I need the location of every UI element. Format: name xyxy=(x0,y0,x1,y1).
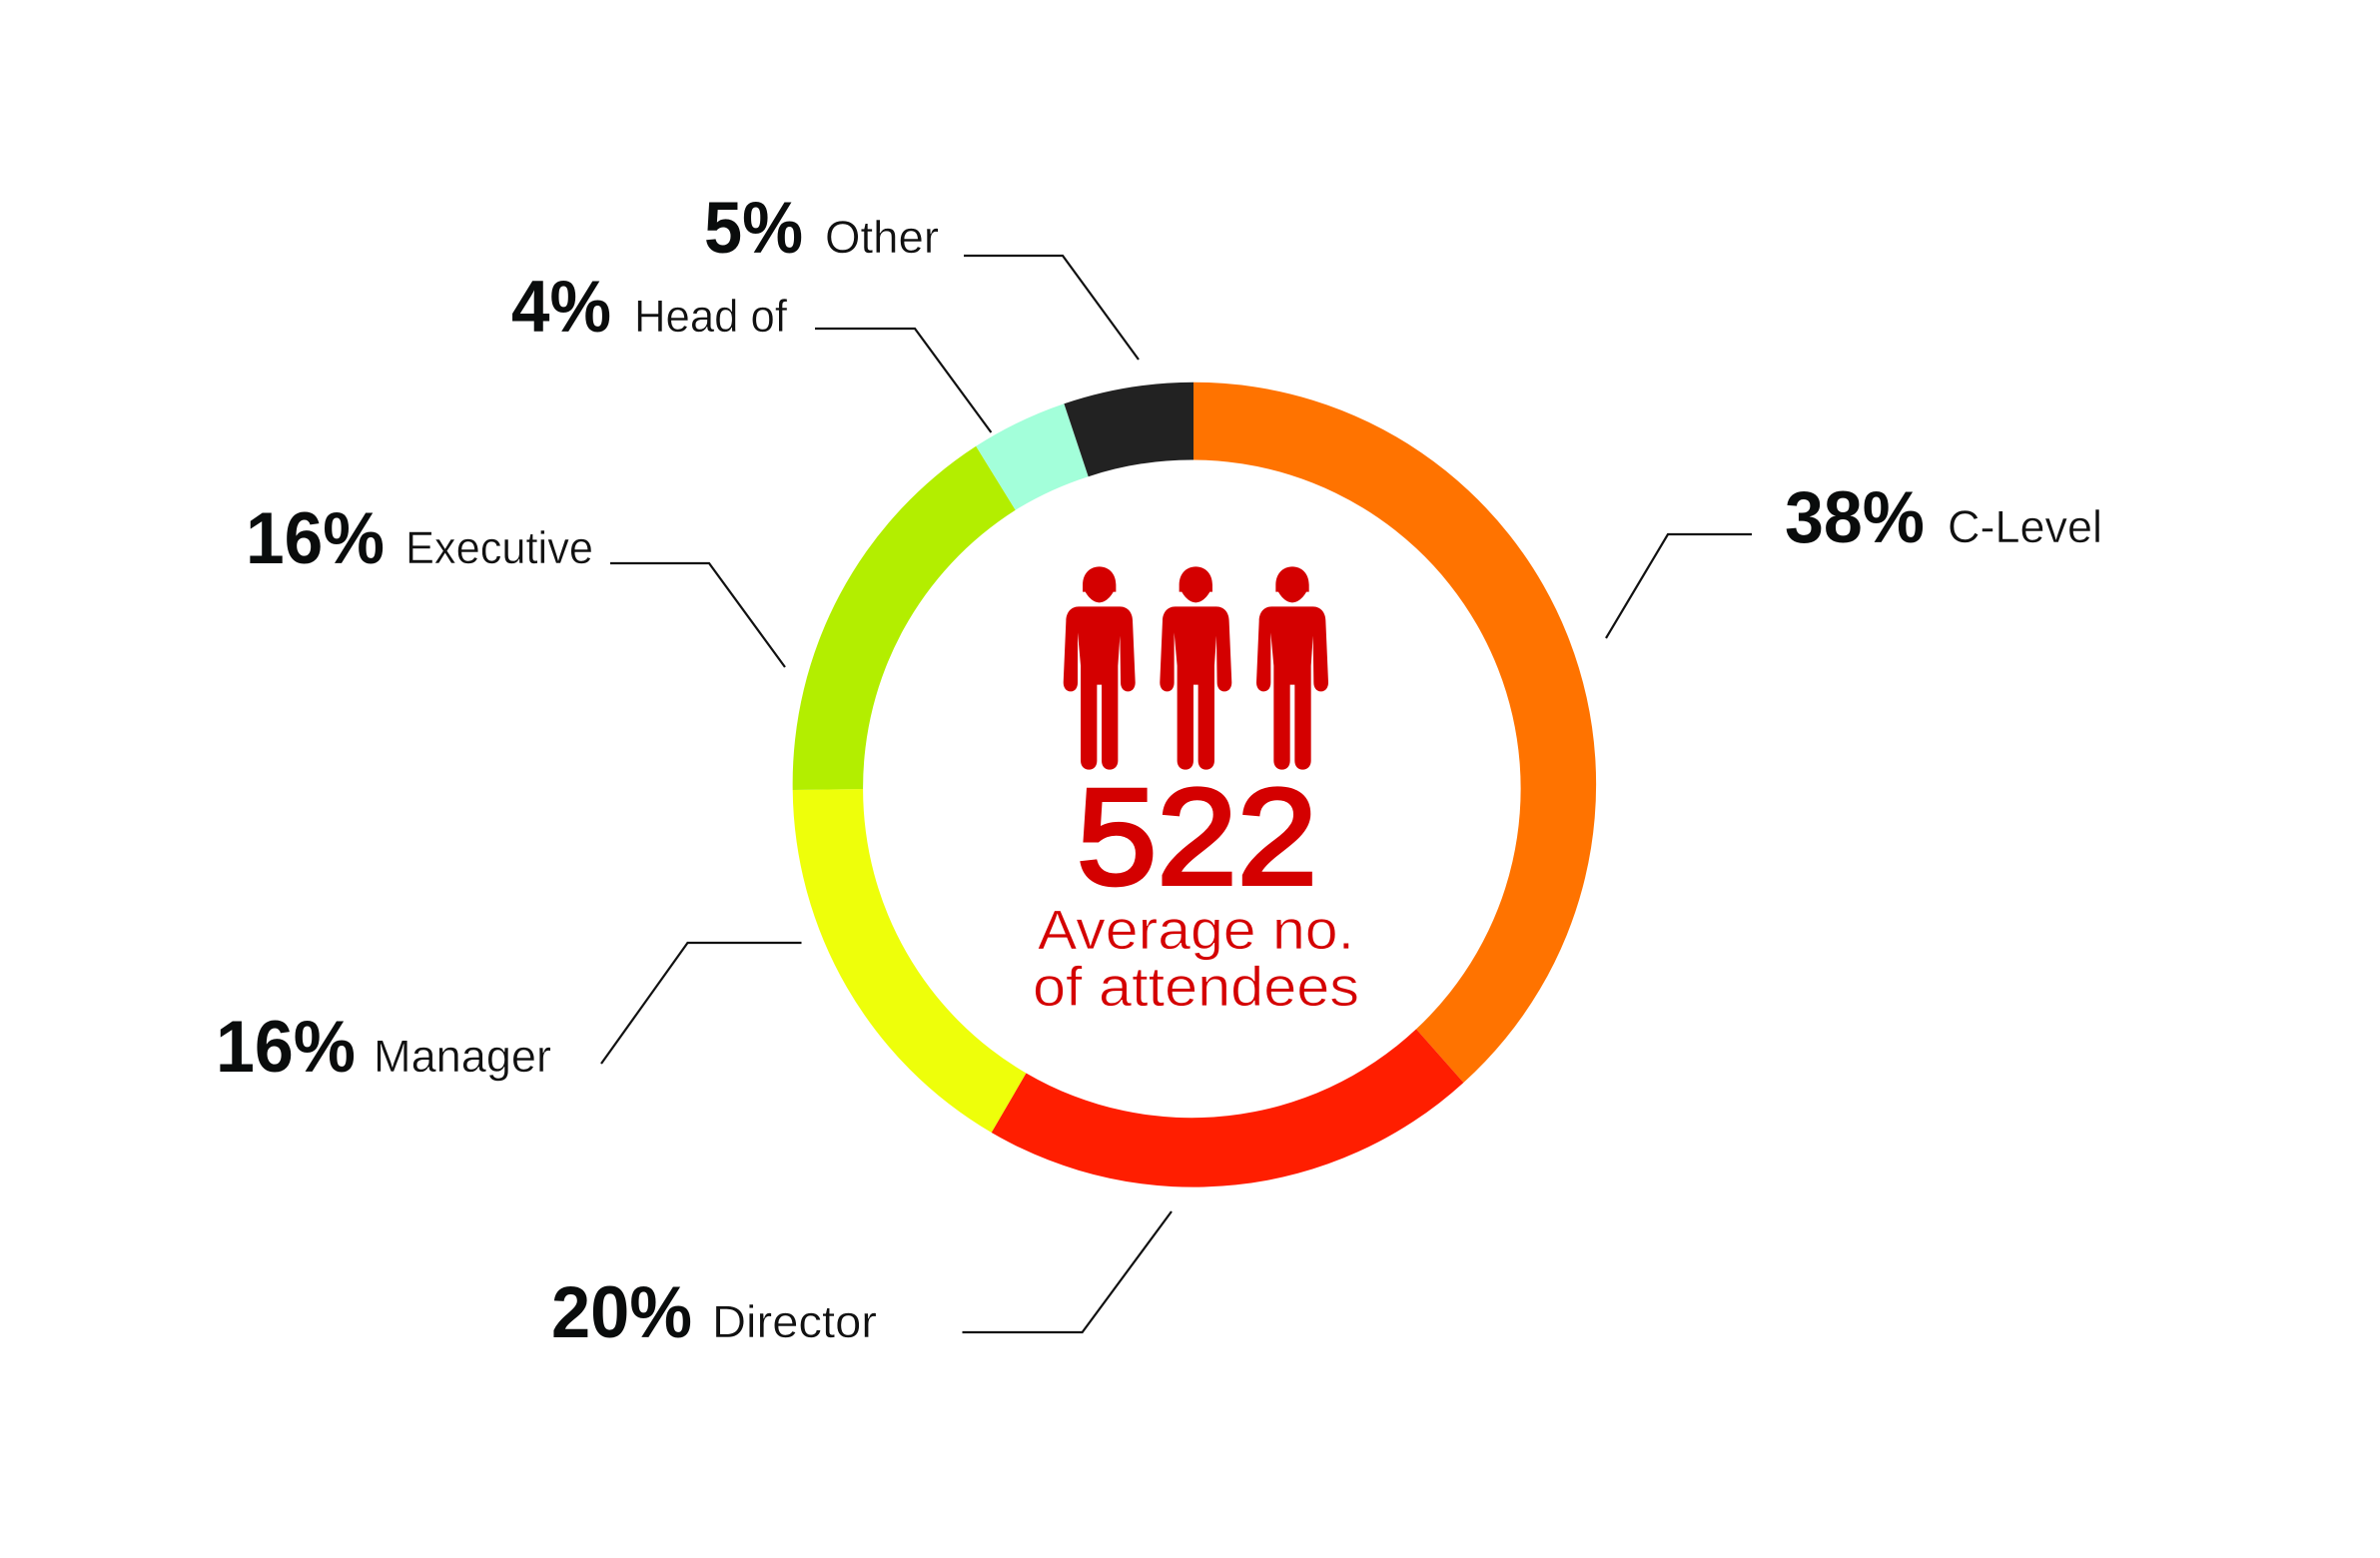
leader line: C-Level xyxy=(1606,534,1752,638)
label: 16% Manager: Manager xyxy=(374,1031,551,1082)
label: 5% Other: 5% xyxy=(704,188,803,269)
label: 16% Manager: 16% xyxy=(216,1007,356,1088)
label: 4% Head of: 4% xyxy=(511,267,611,348)
segment: Director 20% xyxy=(992,1029,1463,1187)
segment: Manager 16% xyxy=(793,789,1026,1133)
icon: person 1 xyxy=(1064,566,1136,770)
label: 20% Director: 20% xyxy=(551,1272,692,1353)
segment: Head of 4% xyxy=(976,403,1089,510)
icon: person 2 xyxy=(1160,566,1231,770)
segment: C-Level 38% xyxy=(1193,383,1596,1083)
caption: average no. of attendees xyxy=(1033,898,1359,1018)
label: 16% Executive xyxy=(246,498,593,579)
label: 20% Director: Director xyxy=(712,1296,877,1347)
caption: average no. of attendees: of attendees xyxy=(1033,955,1359,1018)
leader line: Executive xyxy=(610,563,785,667)
caption: average no. of attendees: Average no. xyxy=(1038,898,1354,961)
label: 38% C-Level: 38% xyxy=(1785,477,1925,558)
donut chart xyxy=(793,383,1596,1187)
leader line: Manager xyxy=(601,943,801,1064)
icon: person 3 xyxy=(1256,566,1328,770)
leader line: Head of xyxy=(815,329,991,432)
big number: 522: 522 xyxy=(1077,761,1317,914)
icon: three people xyxy=(1064,566,1328,770)
label: 16% Manager xyxy=(216,1007,551,1088)
segment: Other 5% xyxy=(1064,383,1193,476)
label: 16% Executive: 16% xyxy=(246,498,385,579)
label: 5% Other: Other xyxy=(825,212,939,263)
label: 4% Head of: Head of xyxy=(634,291,787,342)
label: 5% Other xyxy=(704,188,939,269)
label: 20% Director xyxy=(551,1272,877,1353)
label: 38% C-Level: C-Level xyxy=(1948,501,2102,552)
leader line: Director xyxy=(963,1211,1172,1332)
segment: Executive 16% xyxy=(793,446,1016,790)
label: 4% Head of xyxy=(511,267,787,348)
label: 16% Executive: Executive xyxy=(405,522,593,573)
leader line: Other xyxy=(964,256,1139,360)
label: 38% C-Level xyxy=(1785,477,2102,558)
